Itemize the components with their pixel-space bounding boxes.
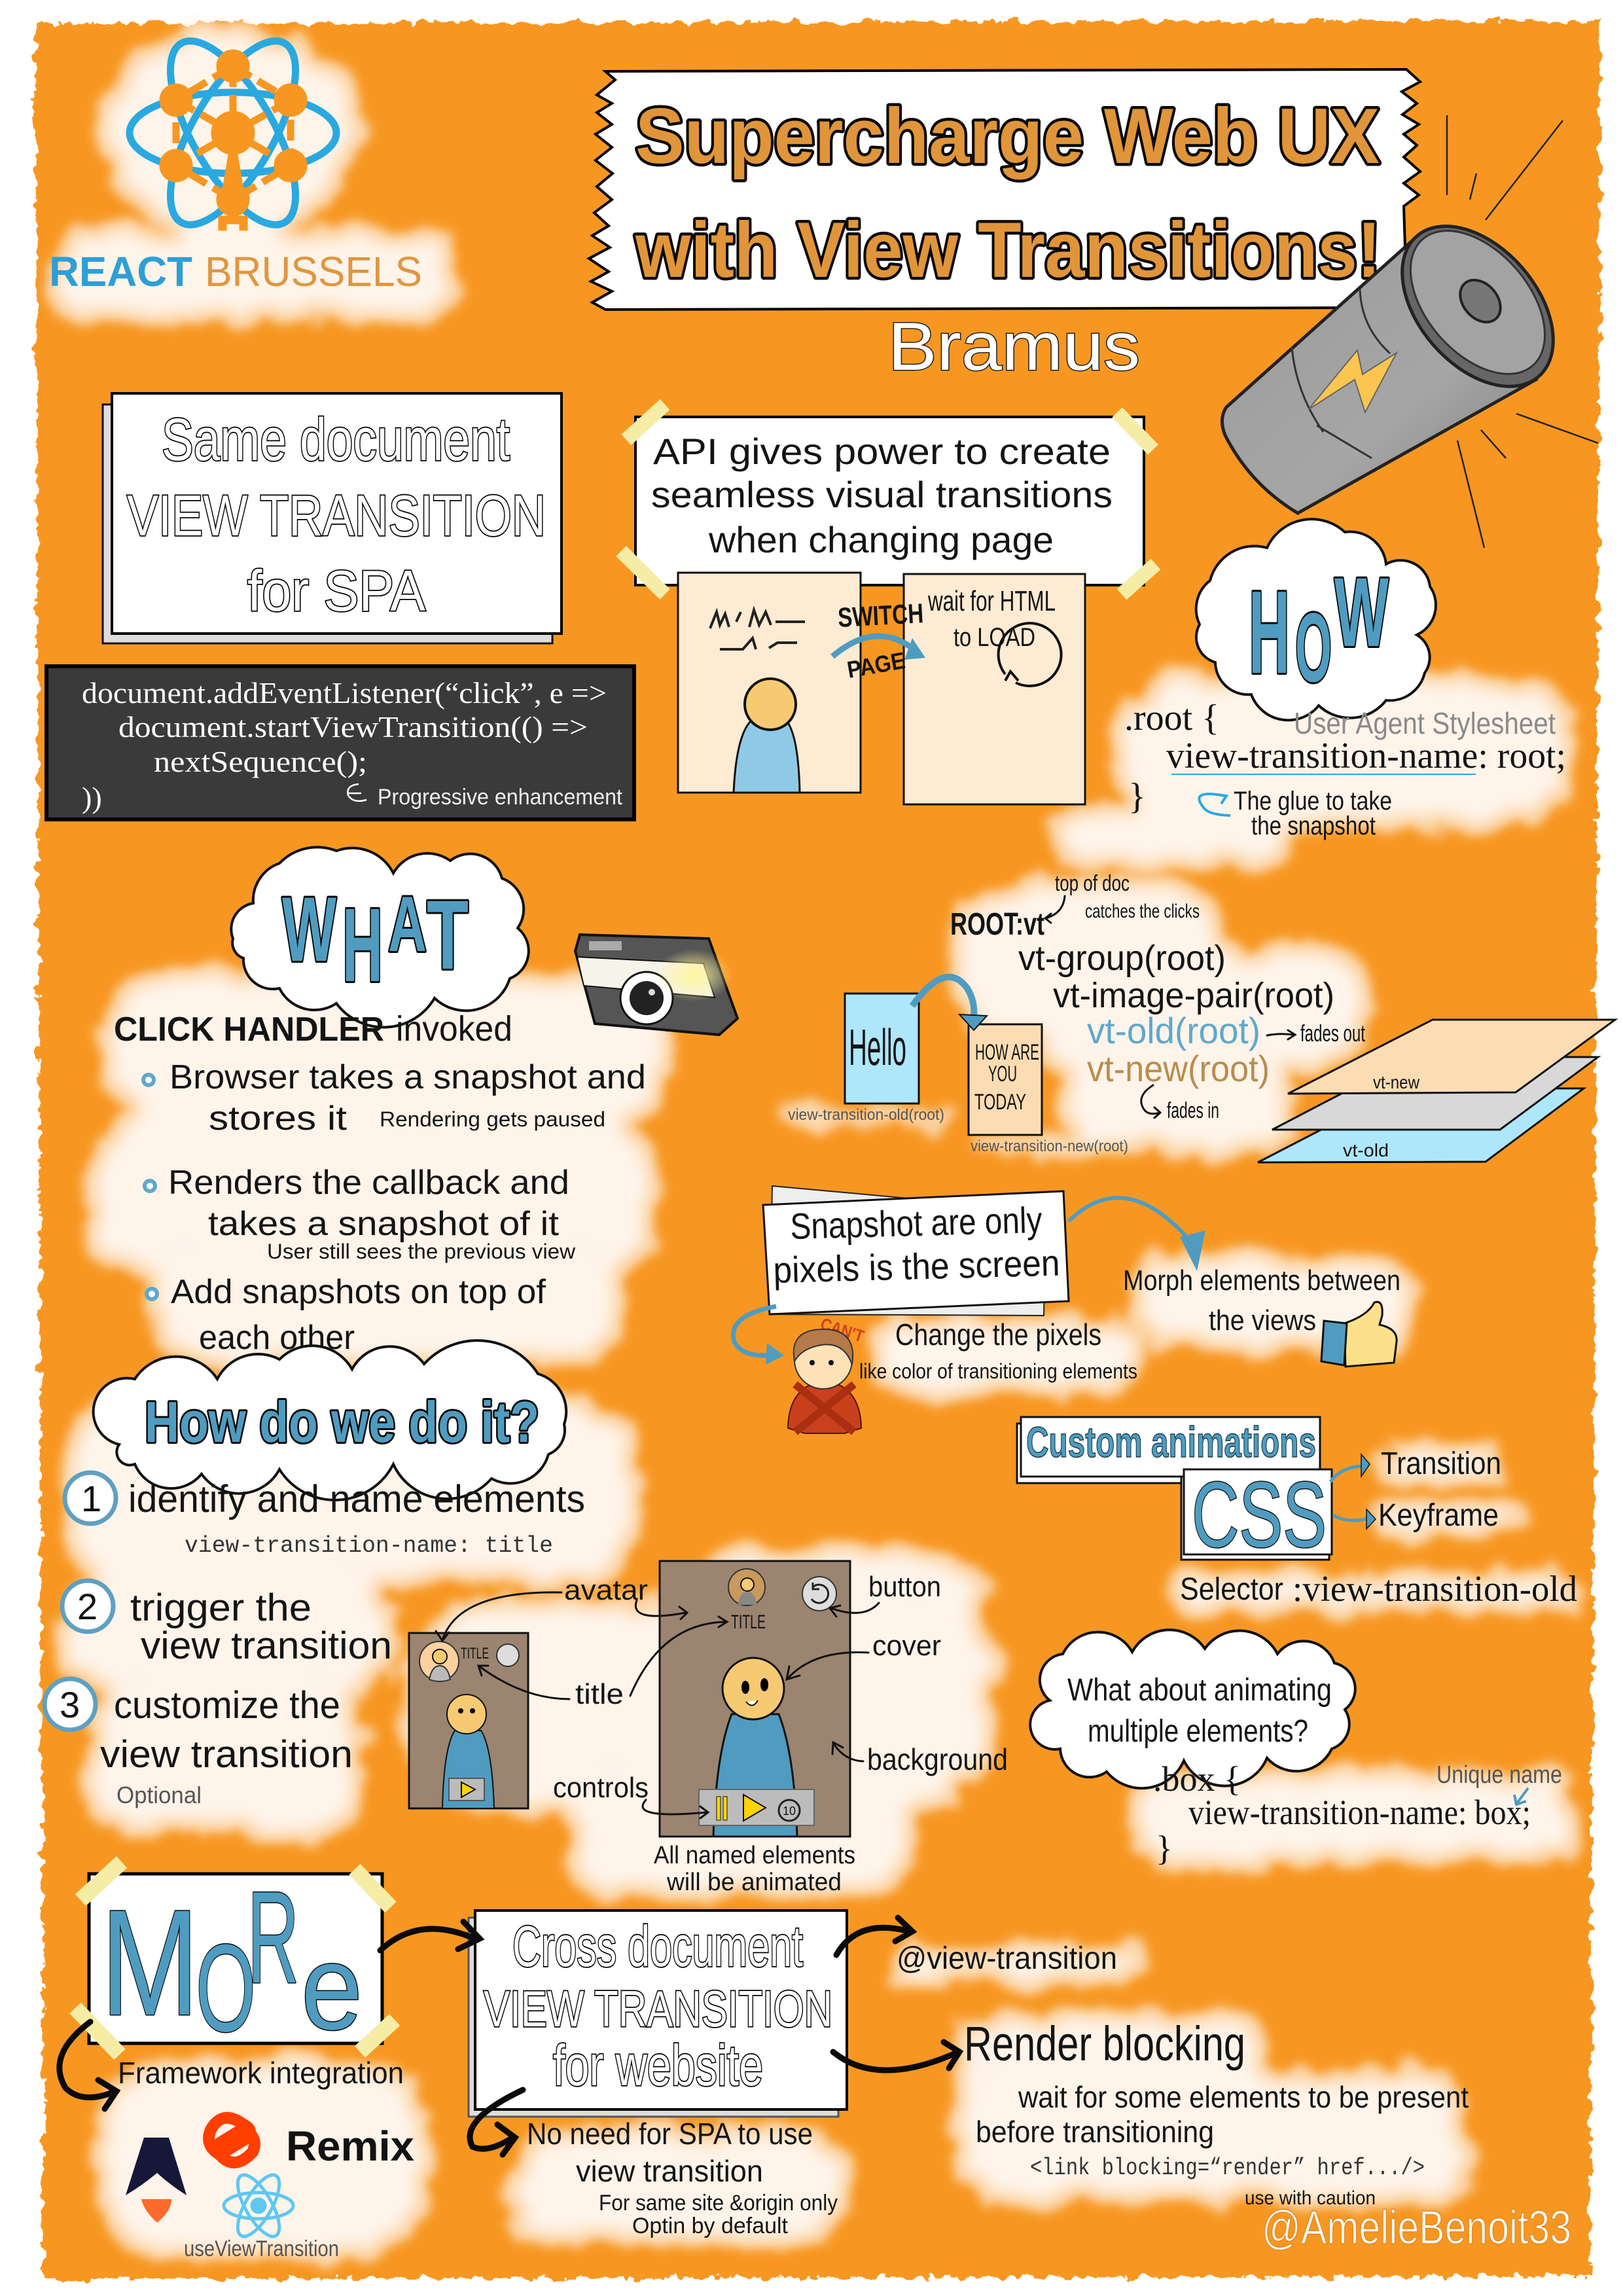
controls bar [699, 1789, 814, 1825]
how cloud heading [1196, 519, 1436, 720]
panel: css: CSS [1192, 1463, 1327, 1567]
text block: change pixels [859, 1318, 1137, 1383]
panel: code sample: nextSequence(); [154, 745, 367, 778]
switch arrow [832, 636, 916, 656]
step 3: 3 [60, 1684, 80, 1725]
remix logo: Remix [286, 2123, 414, 2170]
phone labels: avatar [564, 1574, 648, 1606]
bullet one: Rendering gets paused [380, 1107, 605, 1131]
text block: render blocking: Render blocking [964, 2017, 1245, 2071]
icon: astro logo [126, 2138, 187, 2223]
panel: same document heading: VIEW TRANSITION [127, 483, 546, 548]
text block: no need for SPA: For same site &origin only [599, 2191, 838, 2215]
panel: code sample: document.addEventListener(“click”, e => [82, 676, 607, 709]
panel: custom animations: Custom animations [1026, 1418, 1316, 1466]
arrows: css options [1330, 1454, 1376, 1529]
panel: cross document heading [469, 1910, 847, 2117]
bullet three: Add snapshots on top of [171, 1273, 546, 1311]
panel: same document heading: Same document [162, 406, 510, 473]
how do we do it cloud heading [94, 1340, 566, 1500]
panel: more heading [75, 1862, 395, 2058]
panel: cross document heading: for website [553, 2033, 763, 2098]
text block: change pixels: Change the pixels [895, 1318, 1101, 1352]
text block: framework integration: useViewTransition [184, 2236, 339, 2261]
bullet three: each other [199, 1319, 355, 1357]
step 2: trigger the [130, 1587, 312, 1629]
illustration: stacked layers: vt-old [1343, 1140, 1389, 1160]
bullet one: Browser takes a snapshot and [169, 1058, 646, 1096]
text block: css options: :view-transition-old [1293, 1569, 1577, 1609]
step 2 [62, 1581, 392, 1667]
how cloud heading: H [1249, 567, 1290, 698]
logo: React Brussels: BRUSSELS [205, 248, 422, 295]
text block: box code: } [1156, 1829, 1173, 1868]
illustration: large phone [660, 1561, 850, 1837]
step 1: identify and name elements [128, 1478, 585, 1520]
step 3: view transition [100, 1733, 353, 1776]
text block: root stylesheet: User Agent Stylesheet [1294, 706, 1556, 740]
bullet one [143, 1058, 646, 1138]
icon: thumbs up [1321, 1302, 1397, 1367]
text block: render blocking: before transitioning [976, 2115, 1214, 2149]
panel: more heading: M [101, 1878, 199, 2047]
what cloud heading [231, 847, 529, 1027]
text block: pseudo element tree: catches the clicks [1085, 901, 1200, 922]
phone labels: controls [553, 1772, 649, 1804]
phone labels: cover [872, 1630, 941, 1662]
step 1: 1 [81, 1478, 101, 1519]
bullet two [145, 1164, 576, 1263]
page after [904, 574, 1085, 804]
bullet two: takes a snapshot of it [208, 1205, 560, 1243]
step 3 [45, 1679, 353, 1808]
text block: what happens [114, 1009, 646, 1357]
icon: camera [575, 935, 738, 1035]
panel: snapshot note: pixels is the screen [773, 1242, 1060, 1291]
title text: Supercharge Web UX [635, 92, 1380, 180]
bullet three [147, 1273, 546, 1357]
panel: more heading: R [247, 1865, 299, 2011]
illustration: hello snapshots: view-transition-old(root) [788, 1106, 944, 1124]
phone labels: button [868, 1571, 941, 1603]
panel: cross document heading: VIEW TRANSITION [484, 1980, 832, 2037]
what cloud heading: W [282, 878, 336, 980]
phone labels: All named elements [654, 1842, 855, 1869]
text block: no need for SPA [527, 2117, 838, 2238]
text block: root stylesheet: view-transition-name: root; [1166, 736, 1566, 776]
panel: API description: seamless visual transitions [651, 474, 1113, 515]
bullet one: stores it [209, 1100, 348, 1138]
step 2: view transition [141, 1624, 392, 1667]
how cloud heading: W [1334, 557, 1389, 667]
how do we do it cloud heading: How do we do it? [145, 1390, 539, 1454]
illustration: small phone [409, 1633, 528, 1808]
illustration: page switch: PAGE [845, 647, 907, 683]
text block: pseudo element tree: fades out [1300, 1020, 1365, 1047]
text block: render blocking: use with caution [1245, 2187, 1376, 2209]
panel: same document heading [103, 393, 562, 643]
text block: pseudo element tree: vt-old(root) [1087, 1010, 1260, 1051]
text block: render blocking: <link blocking=“render” href.../> [1030, 2155, 1425, 2181]
what about multiple elements cloud [1030, 1630, 1355, 1788]
text block: css options: Keyframe [1378, 1498, 1499, 1533]
text block: pseudo element tree: vt-group(root) [1018, 939, 1226, 978]
panel: snapshot note: Snapshot are only [790, 1199, 1043, 1247]
text block: root stylesheet: the snapshot [1251, 812, 1376, 840]
step 2: 2 [77, 1586, 98, 1627]
how cloud heading: O [1295, 592, 1332, 702]
text block: no need for SPA: Optin by default [632, 2214, 789, 2238]
illustration: stacked layers [1258, 1020, 1615, 1162]
text block: box code: .box { [1153, 1759, 1241, 1799]
bullet two: User still sees the previous view [267, 1240, 576, 1263]
logo wordmark: REACT [49, 248, 192, 295]
text block: box code [1153, 1759, 1562, 1868]
illustration: hello snapshots: view-transition-new(root) [971, 1138, 1128, 1155]
icon: svelte logo [209, 2118, 255, 2162]
step 3: Optional [116, 1782, 202, 1808]
text block: root stylesheet: The glue to take [1234, 787, 1392, 816]
battery rays [1447, 115, 1598, 548]
phone labels: title [575, 1678, 624, 1710]
icon: battery [1222, 115, 1598, 548]
arrow: snapshot to person [733, 1306, 784, 1365]
illustration: hello snapshots: YOU [988, 1062, 1017, 1086]
panel: css [1181, 1463, 1332, 1567]
panel: more heading: O [196, 1919, 256, 2058]
text block: view transition at rule: @view-transition [897, 1941, 1117, 1976]
title banner [589, 69, 1420, 310]
step 1: view-transition-name: title [185, 1533, 553, 1559]
logo orbits [130, 23, 336, 243]
what cloud heading: H [342, 886, 383, 1003]
text block: pseudo element tree [950, 871, 1365, 1123]
text block: css options: Transition [1381, 1446, 1501, 1481]
text block: pseudo element tree: ROOT:vt [950, 907, 1044, 942]
icon: person crossing arms: CAN'T [818, 1314, 866, 1346]
icon: morph text [1123, 1265, 1400, 1336]
illustration: hello snapshots: TODAY [974, 1090, 1026, 1115]
panel: API description [621, 404, 1156, 594]
illustration: hello snapshots [788, 977, 1128, 1155]
text block: framework integration [118, 2056, 414, 2261]
new view page [969, 1024, 1042, 1135]
icon: person crossing arms [788, 1314, 866, 1433]
step 1 [65, 1473, 585, 1559]
panel: snapshot note [763, 1186, 1069, 1316]
text block: box code: view-transition-name: box; [1188, 1793, 1531, 1832]
text block: what happens: CLICK HANDLER [114, 1011, 384, 1049]
panel: code sample: )) [82, 781, 102, 814]
text block: change pixels: like color of transitioning elements [859, 1359, 1137, 1383]
text block: render blocking [964, 2017, 1469, 2209]
phone labels: background [867, 1742, 1008, 1776]
text block: pseudo element tree: top of doc [1055, 871, 1130, 896]
text block: root stylesheet: .root { [1124, 698, 1219, 738]
black arrows between sections [60, 1918, 959, 2155]
step 3: customize the [114, 1684, 340, 1727]
callout arrows for phone labels [436, 1592, 879, 1818]
what about multiple elements cloud: What about animating [1067, 1673, 1332, 1708]
bullet two: Renders the callback and [168, 1164, 569, 1202]
illustration: hello snapshots: HOW ARE [975, 1040, 1039, 1065]
icon: react logo [224, 2169, 293, 2242]
illustration: page switch: SWITCH [837, 598, 924, 633]
text block: root stylesheet [1124, 698, 1566, 840]
panel: API description: API gives power to create [653, 431, 1111, 472]
illustration: hello snapshots: Hello [849, 1018, 906, 1076]
text block: css options [1180, 1446, 1577, 1609]
arrow: snapshot to morph [1069, 1198, 1205, 1271]
phone labels [553, 1571, 1008, 1896]
illustration: page switch: to LOAD [954, 623, 1035, 652]
text block: root stylesheet: } [1128, 776, 1146, 817]
text block: box code: Unique name [1436, 1761, 1562, 1789]
text block: pseudo element tree: vt-image-pair(root) [1053, 976, 1334, 1015]
illustration: small phone: TITLE [461, 1645, 489, 1662]
panel: code sample: Progressive enhancement [378, 785, 623, 810]
icon: morph text: Morph elements between [1123, 1265, 1400, 1297]
panel: API description: when changing page [708, 519, 1054, 560]
text block: css options: Selector [1180, 1572, 1283, 1607]
text block: no need for SPA: No need for SPA to use [527, 2117, 813, 2151]
controls bar: 10 [783, 1804, 796, 1818]
panel: code sample [46, 666, 634, 819]
arrow between views [912, 977, 974, 1016]
panel: cross document heading: Cross document [512, 1914, 803, 1979]
title banner: with View Transitions! [635, 206, 1381, 294]
illustration: page switch: wait for HTML [927, 585, 1056, 617]
illustration: stacked layers: vt-new [1373, 1072, 1420, 1092]
what cloud heading: T [427, 880, 469, 990]
illustration: large phone: TITLE [731, 1611, 766, 1633]
what about multiple elements cloud: multiple elements? [1088, 1714, 1308, 1749]
page before [678, 573, 861, 793]
text block: pseudo element tree: fades in [1167, 1098, 1219, 1123]
logo: React Brussels [49, 23, 422, 295]
text block: render blocking: wait for some elements to be present [1018, 2080, 1469, 2114]
phone labels: will be animated [666, 1869, 842, 1896]
panel: code sample: document.startViewTransition(() => [118, 710, 588, 744]
text block: what happens: invoked [396, 1009, 512, 1049]
text block: pseudo element tree: vt-new(root) [1087, 1048, 1270, 1089]
logo atomium [160, 50, 307, 230]
panel: more heading: e [301, 1920, 363, 2055]
illustration: page switch [678, 573, 1085, 804]
speaker name: Bramus [888, 309, 1140, 385]
text block: framework integration: Framework integration [118, 2056, 404, 2090]
old view page [845, 994, 919, 1103]
text block: no need for SPA: view transition [576, 2154, 763, 2188]
panel: same document heading: for SPA [247, 558, 425, 623]
what cloud heading: A [388, 880, 427, 968]
icon: morph text: the views [1209, 1304, 1316, 1336]
panel: custom animations [1017, 1417, 1320, 1483]
